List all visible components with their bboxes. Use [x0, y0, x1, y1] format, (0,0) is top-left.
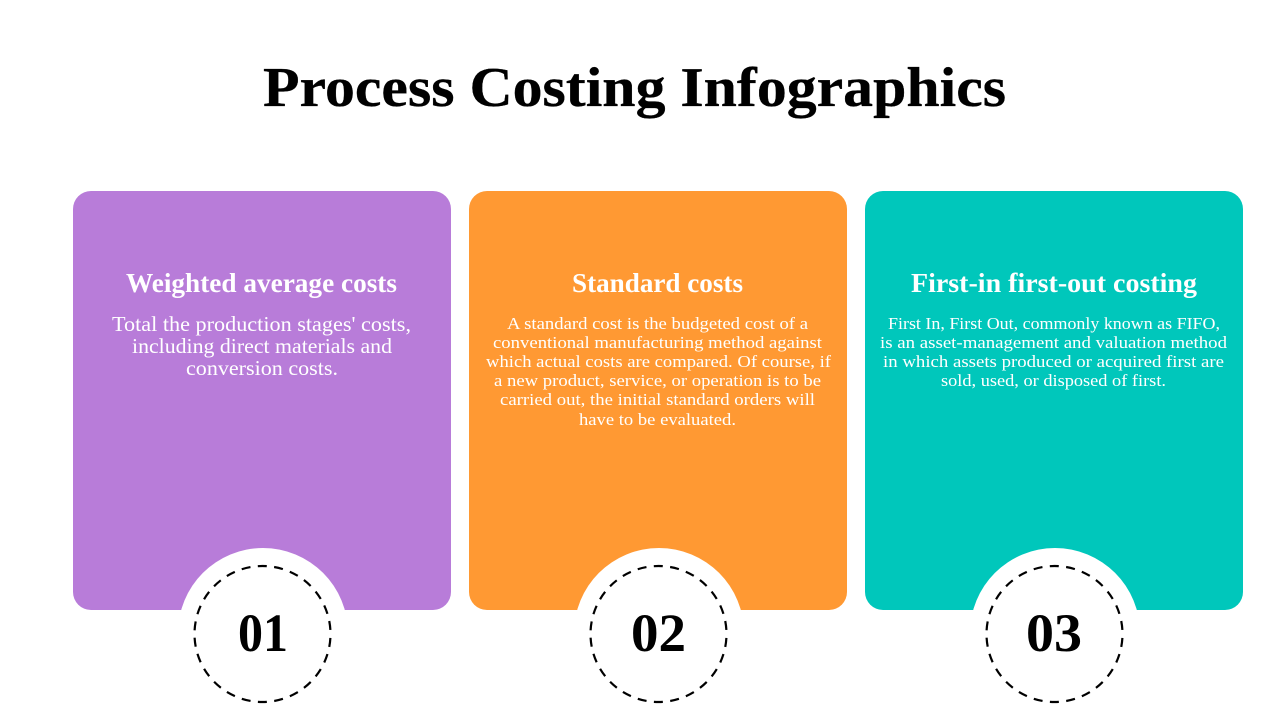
- text block: standard costs description: carried out, the initial standard orders will: [500, 390, 815, 409]
- text block: standard costs description: have to be evaluated.: [579, 410, 736, 429]
- title: Process Costing Infographics: [263, 57, 1006, 119]
- text block: weighted average description: including direct materials and: [132, 334, 393, 358]
- panel background: teal: [865, 191, 1243, 610]
- number badge 02: [574, 548, 744, 718]
- heading: first-in first-out costing: First-in first-out costing: [911, 268, 1198, 298]
- number badge 02: 02: [631, 603, 686, 663]
- text block: weighted average description: conversion costs.: [186, 356, 338, 380]
- text block: FIFO description: sold, used, or disposed of first.: [941, 371, 1166, 390]
- text block: FIFO description: is an asset-management and valuation method: [880, 333, 1228, 352]
- text block: standard costs description: A standard cost is the budgeted cost of a: [507, 314, 808, 333]
- number badge 03: [970, 548, 1140, 718]
- text block: standard costs description: conventional manufacturing method against: [493, 333, 822, 352]
- text block: standard costs description: which actual costs are compared. Of course, if: [486, 352, 831, 371]
- text block: FIFO description: First In, First Out, commonly known as FIFO,: [888, 314, 1220, 333]
- text block: FIFO description: [880, 314, 1228, 390]
- panel: first-in first-out costing: [865, 191, 1243, 718]
- heading: standard costs: Standard costs: [572, 268, 743, 298]
- text block: standard costs description: a new product, service, or operation is to be: [494, 371, 821, 390]
- text block: weighted average description: [112, 312, 411, 380]
- panel background: purple: [73, 191, 451, 610]
- text block: weighted average description: Total the production stages' costs,: [112, 312, 411, 336]
- text block: standard costs description: [486, 314, 831, 429]
- number badge 01: [178, 548, 348, 718]
- panel: standard costs: [469, 191, 847, 718]
- heading: weighted average costs: Weighted average costs: [126, 268, 397, 298]
- number badge 03: 03: [1026, 603, 1082, 663]
- text block: FIFO description: in which assets produced or acquired first are: [883, 352, 1224, 371]
- number badge 01: 01: [238, 603, 288, 663]
- panel: weighted average costs: [73, 191, 451, 718]
- panel background: orange: [469, 191, 847, 610]
